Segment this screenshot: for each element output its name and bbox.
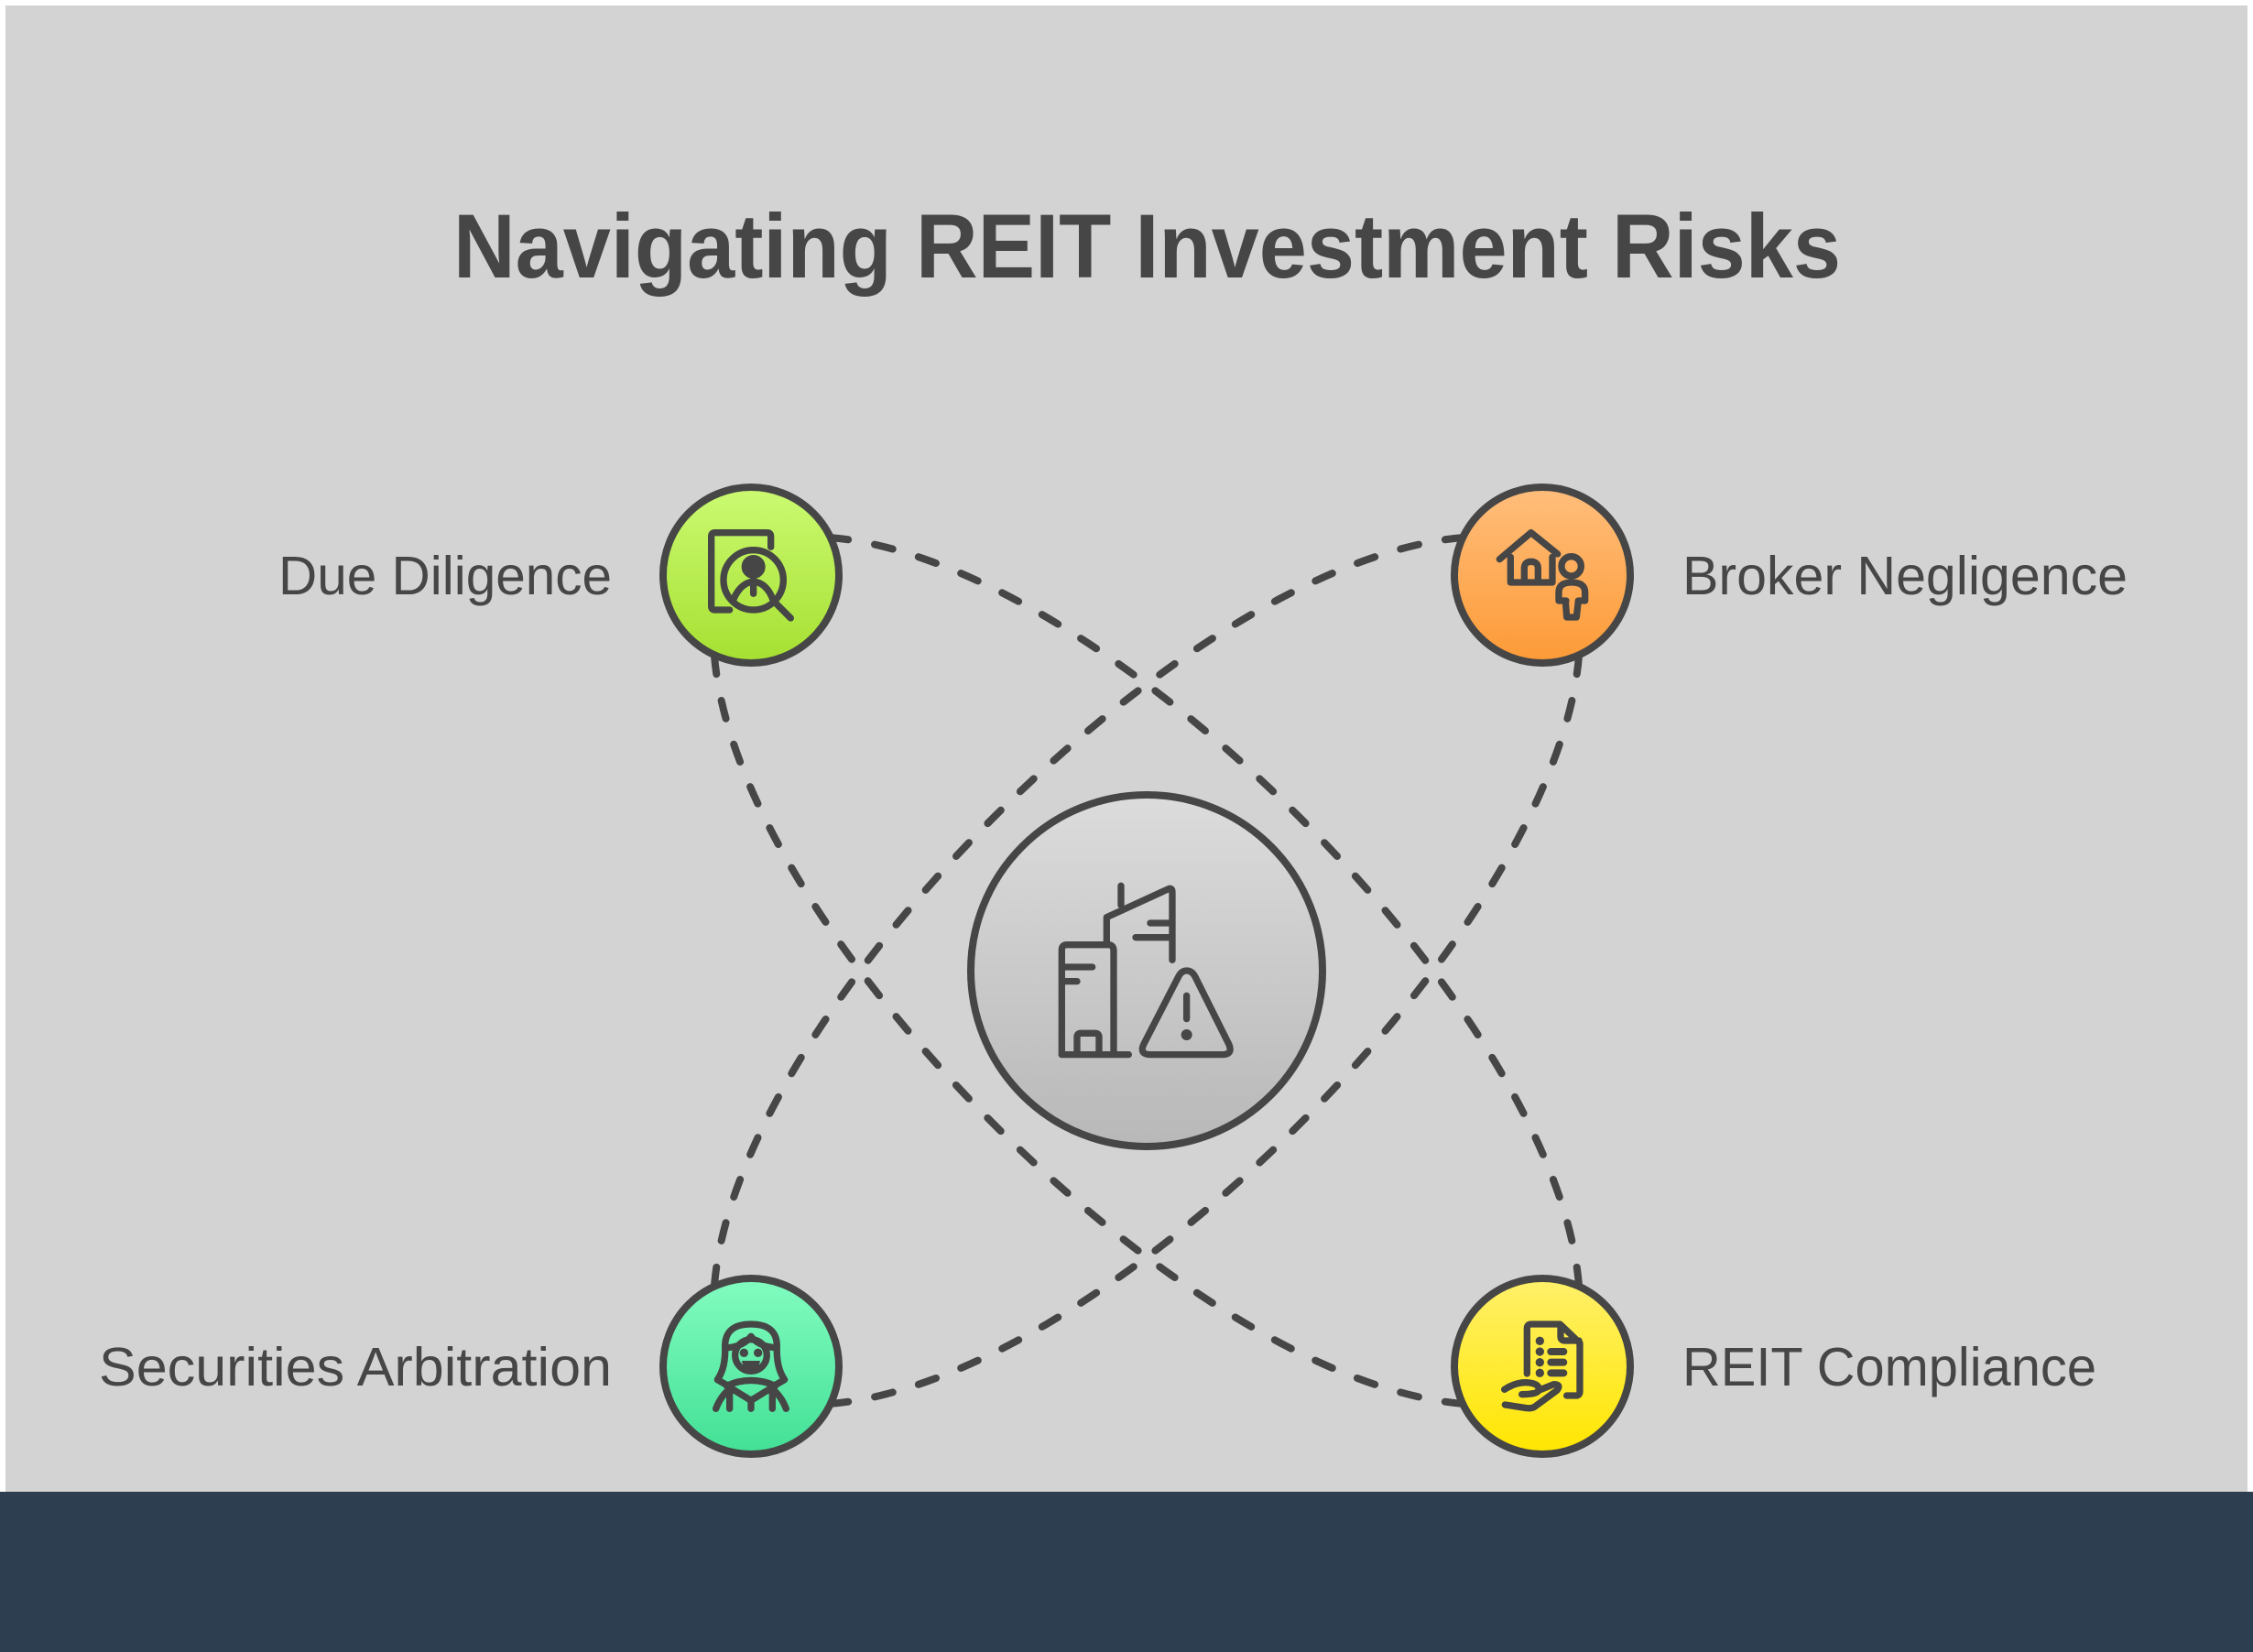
label: Securities Arbitration: Securities Arbitration [99, 1337, 612, 1397]
label: Due Diligence: Due Diligence [278, 546, 612, 606]
node: Due Diligence [663, 487, 839, 663]
dashed connecting arcs [714, 538, 1579, 1404]
central circle: REIT risk [971, 795, 1322, 1147]
icon: document on hand [1505, 1324, 1580, 1408]
node: Securities Arbitration [663, 1278, 839, 1454]
label: REIT Compliance: REIT Compliance [1682, 1337, 2096, 1397]
icon: buildings with warning triangle [1061, 886, 1230, 1055]
title: Navigating REIT Investment Risks [453, 195, 1841, 297]
node: Broker Negligence [1454, 487, 1630, 663]
footer bar [0, 1492, 2253, 1652]
node: REIT Compliance [1454, 1278, 1630, 1454]
icon: woman figure [716, 1324, 786, 1408]
label: Broker Negligence: Broker Negligence [1682, 546, 2128, 606]
icon: document with magnifier and person [712, 533, 790, 618]
icon: house and person [1499, 533, 1585, 617]
